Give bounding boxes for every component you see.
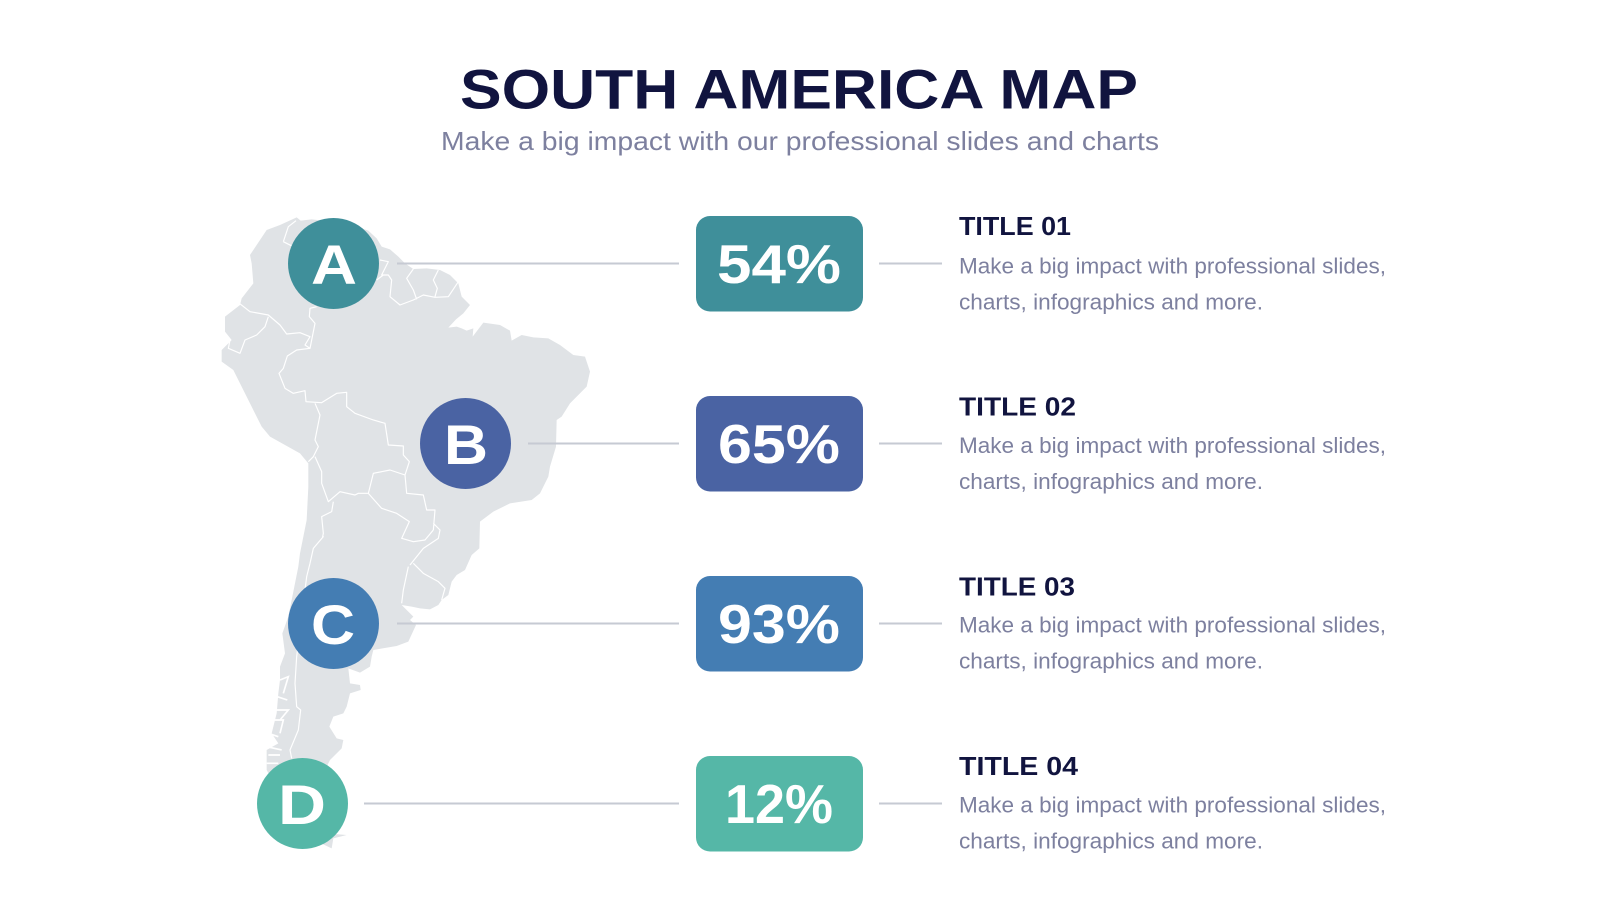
- text block 01: TITLE 01: [959, 211, 1071, 241]
- text block 04: [879, 751, 1386, 854]
- text block 02: [879, 392, 1386, 494]
- marker A: A: [311, 233, 357, 296]
- text block 04: TITLE 04: [959, 751, 1079, 781]
- row A: connector and marker: [288, 218, 679, 309]
- stat C: 93%: [696, 576, 863, 672]
- stat A: 54%: 54%: [717, 233, 841, 295]
- text block 01: [879, 211, 1386, 314]
- row D: connector and marker: [257, 758, 679, 849]
- text block 02: TITLE 02: [959, 392, 1076, 422]
- text block 01: Make a big impact with professional slides,: [959, 254, 1386, 278]
- marker C: C: [311, 593, 355, 656]
- marker B: B: [444, 413, 488, 476]
- stat C: 93%: 93%: [718, 593, 840, 655]
- text block 02: Make a big impact with professional slides,: [959, 433, 1386, 458]
- stat B: 65%: 65%: [718, 413, 840, 475]
- text block 03: [879, 572, 1386, 674]
- map: South America: [222, 217, 590, 848]
- row C: connector and marker: [288, 578, 679, 669]
- stat D: 12%: 12%: [725, 773, 833, 835]
- stat D: 12%: [696, 756, 863, 852]
- marker D: D: [278, 773, 326, 836]
- text block 03: TITLE 03: [959, 572, 1075, 602]
- title: SOUTH AMERICA MAP: [460, 58, 1138, 120]
- stat B: 65%: [696, 396, 863, 492]
- text block 04: Make a big impact with professional slides,: [959, 792, 1386, 818]
- marker A: [288, 218, 379, 309]
- text block 01: charts, infographics and more.: [959, 290, 1263, 314]
- subtitle: Make a big impact with our professional slides and charts: [441, 126, 1159, 156]
- row B: connector and marker: [420, 398, 679, 489]
- text block 04: charts, infographics and more.: [959, 828, 1263, 854]
- marker B: [420, 398, 511, 489]
- marker C: [288, 578, 379, 669]
- marker D: [257, 758, 348, 849]
- stat A: 54%: [696, 216, 863, 312]
- text block 03: charts, infographics and more.: [959, 648, 1263, 674]
- text block 02: charts, infographics and more.: [959, 469, 1263, 494]
- text block 03: Make a big impact with professional slides,: [959, 612, 1386, 638]
